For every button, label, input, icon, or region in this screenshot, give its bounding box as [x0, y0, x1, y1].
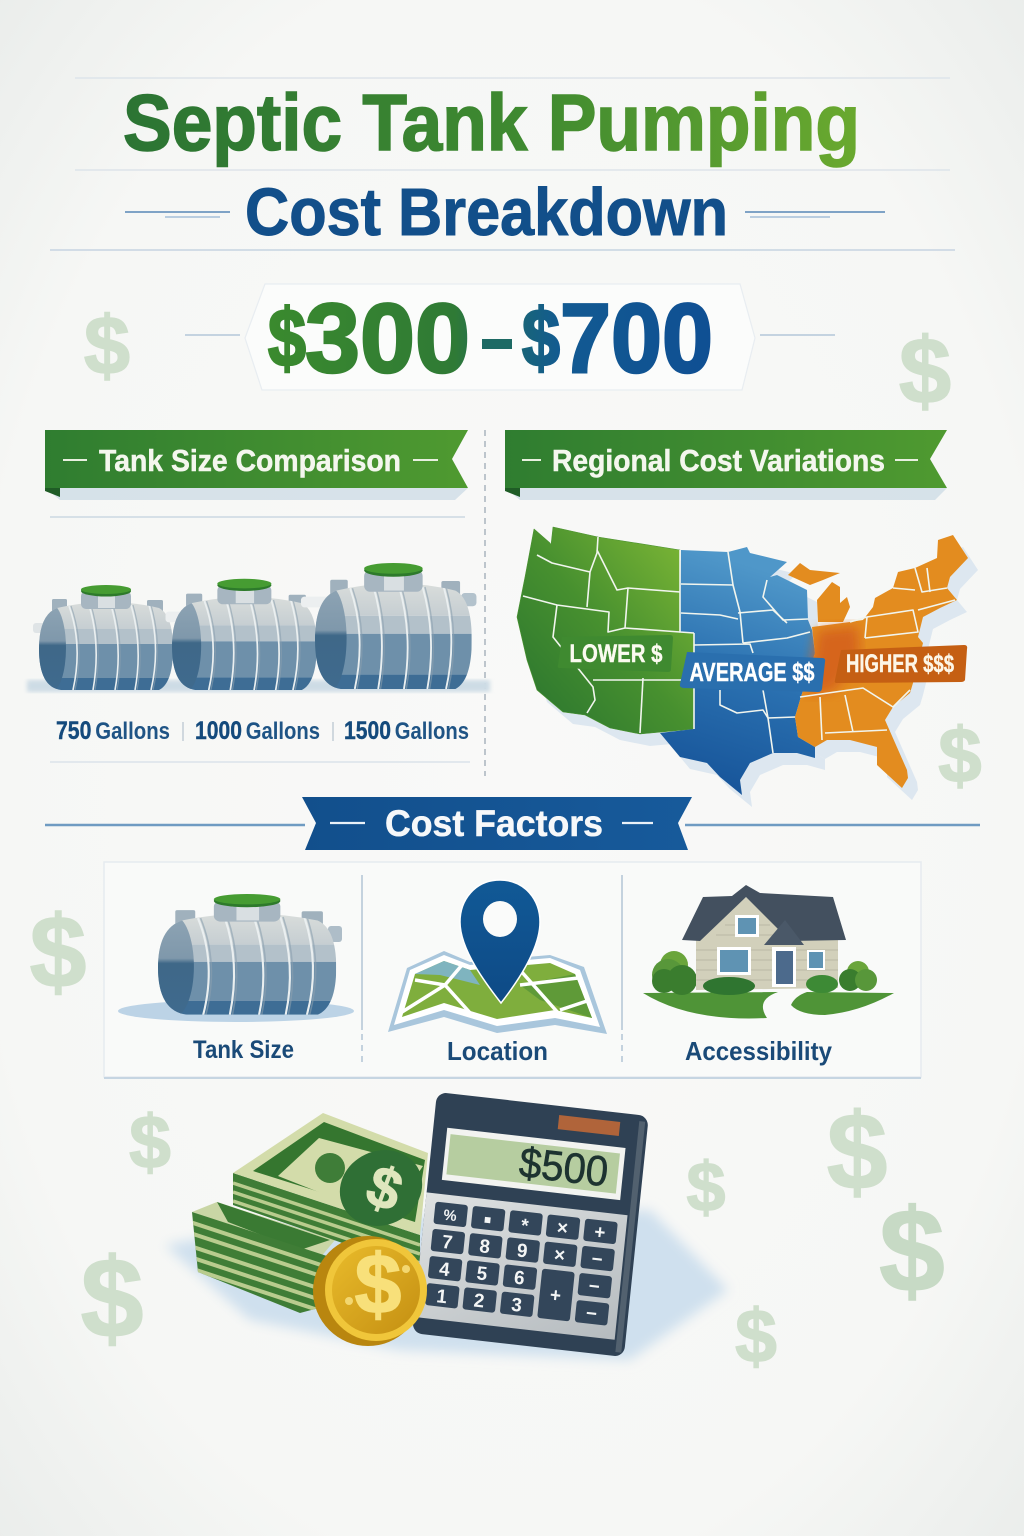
label: lower — [558, 635, 673, 672]
price range banner: 700 — [560, 283, 713, 393]
key legends — [434, 1205, 606, 1325]
label 1000: 1000 Gallons — [195, 717, 320, 745]
price range banner: 300 — [305, 283, 470, 393]
roof — [682, 885, 846, 941]
label: Location — [447, 1036, 548, 1066]
icon: folded map — [388, 951, 607, 1034]
title — [123, 78, 885, 250]
bushes — [652, 951, 877, 995]
key legends: × — [553, 1245, 566, 1267]
tank: 750 gallons — [33, 585, 173, 692]
display screen — [446, 1130, 620, 1197]
body — [412, 1092, 649, 1357]
key legends: 2 — [473, 1290, 485, 1313]
section rule behind cost factors — [45, 824, 980, 826]
display screen: $500 — [517, 1138, 611, 1195]
east region — [788, 535, 968, 788]
heading ribbon: tank size comparison: Tank Size Comparison — [99, 443, 401, 478]
key legends: 7 — [441, 1232, 454, 1254]
label: higher — [835, 645, 967, 683]
key legends: * — [520, 1215, 530, 1237]
heading ribbon: cost factors — [302, 797, 692, 850]
label 750: 750 Gallons — [56, 717, 170, 745]
key legends: − — [590, 1249, 604, 1271]
background dollar signs: $ — [129, 1100, 171, 1184]
icon: house — [643, 885, 894, 1018]
label: average: AVERAGE $$ — [690, 657, 815, 687]
state lines — [523, 537, 955, 753]
label: lower: LOWER $ — [570, 640, 663, 668]
key legends: + — [549, 1285, 562, 1307]
header rules — [50, 78, 955, 250]
background dollar signs: $ — [827, 1091, 887, 1213]
solar strip — [558, 1115, 620, 1136]
key legends: + — [593, 1222, 606, 1244]
key legends: 4 — [438, 1259, 451, 1281]
price dash — [482, 339, 512, 349]
panel frame — [104, 862, 921, 1077]
label: higher: HIGHER $$$ — [846, 650, 954, 678]
title line 1: Septic Tank Pumping — [123, 78, 860, 167]
label: Tank Size — [193, 1036, 294, 1064]
front shrubs — [703, 977, 755, 995]
icon: calculator — [412, 1092, 649, 1357]
key panel — [414, 1192, 628, 1340]
background dollar signs: $ — [81, 1235, 143, 1361]
label: Accessibility — [685, 1036, 832, 1066]
central region — [660, 547, 815, 795]
price: high: $ — [522, 293, 560, 384]
walls — [696, 897, 838, 990]
key legends: 3 — [510, 1295, 523, 1317]
key legends: 8 — [478, 1236, 491, 1258]
key legends: 1 — [435, 1286, 448, 1308]
lower stack — [192, 1202, 335, 1313]
soft shadow — [165, 1210, 728, 1360]
west region — [517, 527, 694, 734]
background dollar signs: $ — [938, 711, 982, 799]
background dollar signs: $ — [879, 1185, 945, 1317]
price: low: $ — [268, 293, 306, 384]
title line 2: Cost Breakdown — [245, 175, 728, 250]
display bezel — [442, 1128, 626, 1200]
ground shadow — [27, 680, 490, 692]
heading ribbon: cost factors: Cost Factors — [385, 803, 603, 844]
windows and door — [735, 915, 759, 937]
heading ribbon: regional cost variations — [505, 430, 947, 500]
key legends: 9 — [516, 1240, 528, 1263]
key legends: − — [585, 1303, 598, 1325]
heading ribbon: regional cost variations: Regional Cost Variations — [552, 443, 885, 478]
title side rules — [125, 212, 885, 217]
midwest dark patch — [808, 626, 860, 695]
icon: location pin — [460, 880, 540, 1003]
background dollar signs: $ — [687, 1148, 725, 1226]
tank: 1000 gallons — [166, 579, 317, 692]
factor: tank size — [118, 894, 354, 1064]
key legends: % — [443, 1207, 458, 1225]
lawn — [643, 992, 778, 1018]
label 1500: 1500 Gallons — [344, 717, 469, 745]
factor: location — [388, 880, 607, 1066]
panel dividers — [362, 875, 622, 1066]
US regional cost map — [517, 527, 978, 807]
heading ribbon: tank size comparison — [45, 430, 468, 500]
icon: gold coin: $ — [355, 1237, 401, 1331]
factor: accessibility — [643, 885, 894, 1066]
panel: cost factors — [104, 862, 921, 1078]
banner side rules — [185, 334, 835, 336]
key legends: ■ — [483, 1212, 492, 1227]
background dollar signs — [30, 299, 982, 1378]
tank comparison illustration — [27, 563, 490, 692]
tank: 1500 gallons — [301, 563, 476, 691]
background dollar signs: $ — [84, 299, 130, 392]
key legends: 5 — [476, 1263, 489, 1286]
key legends: × — [556, 1218, 569, 1240]
keys — [425, 1202, 618, 1326]
upper stack: $ — [358, 1153, 411, 1225]
key legends: − — [588, 1276, 601, 1298]
upper stack — [233, 1113, 428, 1263]
icon: gold coin — [313, 1236, 427, 1346]
banner backing — [245, 284, 755, 390]
map shadow — [527, 539, 978, 807]
gallon labels — [56, 717, 469, 745]
label: average — [680, 652, 825, 692]
background dollar signs: $ — [30, 895, 86, 1009]
icon: tank — [118, 894, 354, 1022]
icon: cash stacks — [185, 1113, 435, 1320]
section rules and divider — [50, 430, 485, 776]
background dollar signs: $ — [899, 318, 951, 423]
price range banner — [185, 283, 835, 393]
money and calculator illustration — [165, 1092, 728, 1360]
key legends: 6 — [513, 1267, 526, 1290]
background dollar signs: $ — [735, 1294, 777, 1378]
